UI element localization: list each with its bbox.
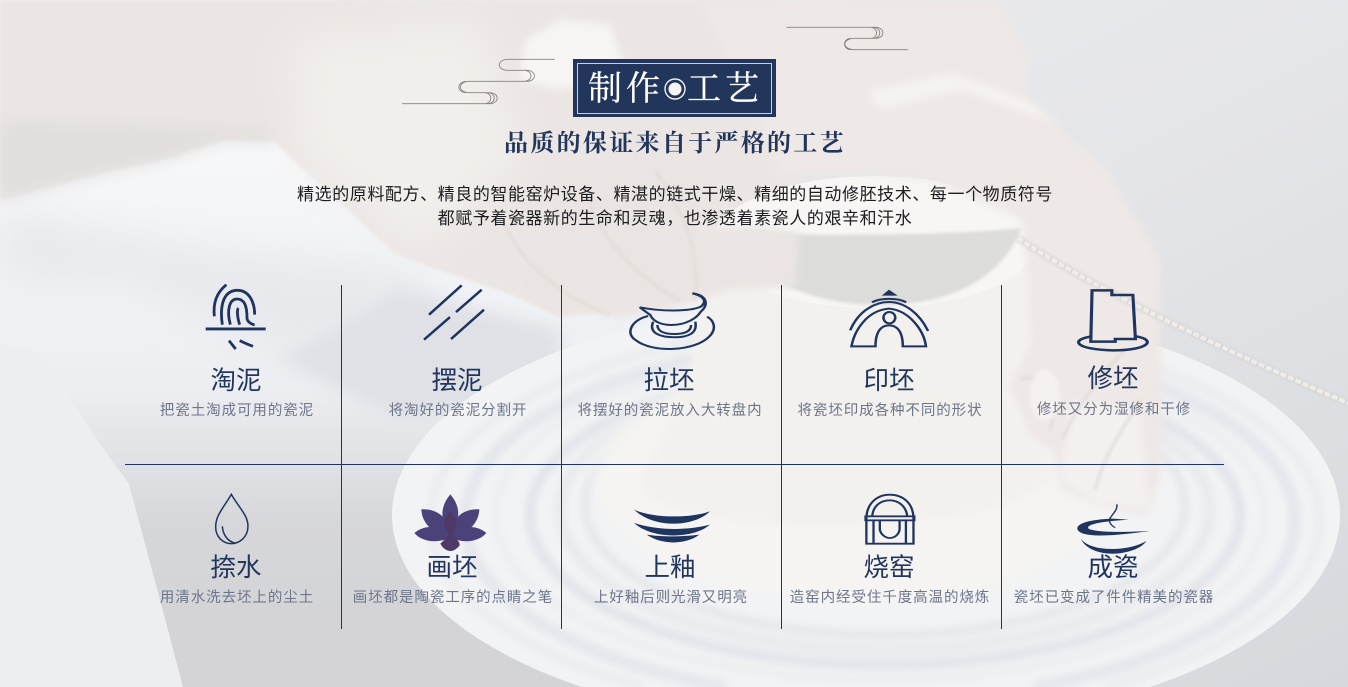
step: 印坯 [797, 290, 983, 419]
step: 画坯: 画坯都是陶瓷工序的点睛之笔 [353, 590, 553, 606]
intro paragraph [297, 185, 1053, 228]
intro paragraph: 都赋予着瓷器新的生命和灵魂，也渗透着素瓷人的艰辛和汗水 [438, 209, 912, 228]
step: 淘泥: 把瓷土淘成可用的瓷泥 [160, 403, 314, 419]
icon: steaming bowl [1077, 504, 1150, 554]
step: 烧窑: 造窑内经受住千度高温的烧炼 [790, 590, 990, 606]
decorative cloud left [402, 58, 555, 104]
step: 修坯: 修坯 [1087, 365, 1138, 393]
title badge: 制 [588, 71, 622, 108]
step: 上釉: 上好釉后则光滑又明亮 [594, 590, 748, 606]
pot [640, 230, 1050, 525]
step: 上釉: 上釉 [644, 554, 696, 582]
icon: cup on wheel [629, 292, 716, 350]
decorative cloud right [786, 26, 908, 50]
step: 烧窑: 烧窑 [863, 554, 914, 582]
step: 上釉 [594, 510, 748, 606]
step: 捺水: 用清水洗去坯上的尘土 [160, 590, 314, 606]
step: 成瓷 [1014, 504, 1214, 606]
step: 印坯: 将瓷坯印成各种不同的形状 [797, 403, 983, 419]
icon: trimmed blank on base [1076, 289, 1149, 352]
icon: glaze layers [634, 510, 710, 542]
step: 拉坯: 拉坯 [643, 367, 694, 395]
step: 画坯 [353, 494, 553, 606]
step: 摆泥: 摆泥 [431, 367, 482, 395]
step: 摆泥: 将淘好的瓷泥分割开 [389, 403, 527, 419]
grid lines [125, 285, 1224, 629]
title badge: 作 [626, 71, 660, 108]
right hand [700, 0, 1162, 517]
step: 拉坯 [577, 292, 763, 419]
twine [1018, 238, 1348, 403]
step: 淘泥 [160, 284, 314, 419]
bottom-left cloth [0, 344, 183, 687]
step: 印坯: 印坯 [863, 367, 914, 395]
icon: kiln [864, 494, 916, 545]
icon: diagonal cuts [423, 284, 485, 341]
step: 捺水: 捺水 [210, 554, 262, 582]
subtitle: 品质的保证来自于严格的工艺 [504, 131, 846, 157]
step: 成瓷: 瓷坯已变成了件件精美的瓷器 [1014, 590, 1214, 606]
title badge: 工 [687, 71, 721, 108]
step: 修坯: 修坯又分为湿修和干修 [1037, 402, 1191, 418]
wheel [392, 300, 1340, 687]
icon: water drop [214, 493, 249, 544]
left hand fingers [520, 130, 799, 318]
step: 画坯: 画坯 [426, 554, 478, 582]
step: 烧窑 [790, 494, 990, 606]
intro paragraph: 精选的原料配方、精良的智能窑炉设备、精湛的链式干燥、精细的自动修胚技术、每一个物质符号 [297, 185, 1053, 204]
forearm [0, 0, 800, 317]
step: 捺水 [160, 493, 314, 606]
icon: lotus [414, 494, 486, 551]
step: 拉坯: 将摆好的瓷泥放入大转盘内 [577, 403, 763, 419]
step: 修坯 [1037, 289, 1191, 418]
step: 成瓷: 成瓷 [1087, 554, 1138, 582]
title badge [573, 59, 776, 117]
step: 淘泥: 淘泥 [210, 367, 262, 395]
icon: arched mould [849, 290, 930, 348]
title badge: 艺 [725, 71, 759, 108]
icon: fingerprint [206, 284, 266, 350]
step: 摆泥 [389, 284, 527, 419]
